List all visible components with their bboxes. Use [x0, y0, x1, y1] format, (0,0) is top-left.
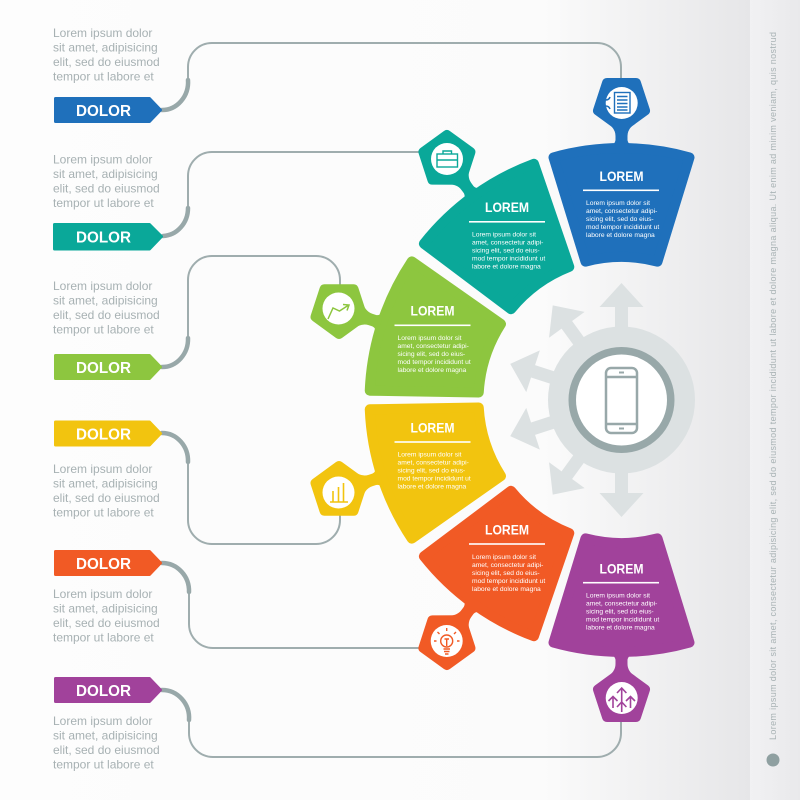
text: blue segment: LOREM [600, 168, 644, 184]
icon: document [606, 87, 638, 119]
text block 3: sit amet, adipisicing [53, 294, 158, 308]
text: green segment: Lorem ipsum dolor sit [398, 335, 462, 342]
icon: bar chart [322, 476, 354, 508]
text: orange segment: labore et dolore magna [472, 586, 541, 593]
text: teal segment: labore et dolore magna [472, 264, 541, 270]
text: purple segment: LOREM [600, 560, 644, 576]
icon: three up arrows [606, 682, 638, 714]
connector: blue [162, 43, 621, 110]
text: blue segment [583, 168, 659, 239]
text block 2 [53, 152, 160, 210]
text block 3: tempor ut labore et [53, 322, 154, 336]
panel: blue segment [554, 83, 690, 262]
text: teal segment [469, 199, 545, 270]
text block 5: elit, sed do eiusmod [53, 616, 160, 630]
tag: green dolor: DOLOR [76, 360, 131, 377]
pentagon badge [416, 606, 480, 670]
text: orange segment: mod tempor incididunt ut [472, 578, 545, 585]
sidebar dot [766, 754, 780, 766]
tag: purple dolor: DOLOR [76, 683, 131, 700]
text: orange segment: Lorem ipsum dolor sit [472, 554, 536, 561]
connector: orange [162, 563, 420, 648]
text block 4: sit amet, adipisicing [53, 476, 158, 490]
hub rings [548, 326, 695, 474]
text: yellow segment: LOREM [410, 419, 454, 435]
text block 3: Lorem ipsum dolor [53, 279, 152, 293]
text block 6: elit, sed do eiusmod [53, 743, 160, 757]
tag: blue dolor [56, 98, 160, 122]
text: green segment [394, 303, 471, 374]
icon: briefcase [431, 143, 463, 175]
text: blue segment: Lorem ipsum dolor sit [586, 200, 650, 207]
tag: orange dolor [56, 552, 160, 574]
panel: teal segment [380, 104, 595, 328]
text: orange segment: LOREM [485, 521, 529, 537]
text block 4: Lorem ipsum dolor [53, 462, 152, 476]
text: orange segment [469, 521, 545, 593]
connector: green [162, 256, 340, 367]
tag: teal dolor [54, 224, 162, 249]
icon: smartphone [606, 368, 637, 433]
text: teal segment: Lorem ipsum dolor sit [472, 232, 536, 238]
text: green segment: sicing elit, sed do eius- [398, 351, 465, 358]
text block 1: elit, sed do eiusmod [53, 55, 160, 69]
text block 2: sit amet, adipisicing [53, 167, 158, 181]
central hub with arrows [503, 283, 695, 517]
text: yellow segment: sicing elit, sed do eius- [398, 468, 465, 475]
connector: yellow [162, 433, 340, 544]
text block 5: tempor ut labore et [53, 630, 154, 644]
text block 6 [53, 714, 160, 772]
text: green segment: mod tempor incididunt ut [398, 359, 471, 366]
text: green segment: labore et dolore magna [398, 367, 467, 374]
text block 1: Lorem ipsum dolor [53, 26, 152, 40]
sidebar panel [750, 0, 800, 800]
panel: purple segment [554, 538, 690, 717]
text: green segment: LOREM [410, 303, 454, 319]
text block 6: tempor ut labore et [53, 758, 154, 772]
pentagon badge [598, 83, 645, 128]
text: orange segment: amet, consectetur adipi- [472, 562, 543, 569]
text: yellow segment [394, 419, 471, 491]
text block 2: elit, sed do eiusmod [53, 182, 160, 196]
text block 4 [53, 462, 160, 520]
text: yellow segment: amet, consectetur adipi- [398, 460, 469, 467]
text: purple segment: amet, consectetur adipi- [586, 600, 657, 607]
text block 1: tempor ut labore et [53, 70, 154, 84]
text: yellow segment: mod tempor incididunt ut [398, 476, 471, 483]
tag: green dolor [56, 356, 160, 378]
text block 6: Lorem ipsum dolor [53, 714, 152, 728]
connector: purple [162, 690, 621, 757]
radiating arrows [503, 283, 644, 517]
pentagon badge [313, 461, 370, 519]
text block 6: sit amet, adipisicing [53, 728, 158, 742]
text block 5: sit amet, adipisicing [53, 602, 158, 616]
text: blue segment: amet, consectetur adipi- [586, 208, 657, 215]
pentagon badge [416, 130, 480, 194]
pentagon badge [313, 281, 370, 339]
tag: yellow dolor [56, 422, 160, 445]
text: blue segment: labore et dolore magna [586, 232, 655, 239]
panel: green segment [299, 238, 511, 423]
text block 3 [53, 279, 160, 336]
tag: blue dolor: DOLOR [76, 103, 131, 120]
text: purple segment: sicing elit, sed do eius- [586, 608, 654, 615]
icon: rising line chart [322, 292, 354, 324]
sidebar vertical text: Lorem ipsum dolor sit amet, consectetur adipisicing elit, sed do eiusmod tempor incididunt ut labore et dolore magna aliqua. Ut enim ad minim veniam, quis nostrud [768, 32, 778, 740]
text: teal segment: LOREM [485, 199, 529, 215]
text: blue segment: mod tempor incididunt ut [586, 224, 659, 231]
text block 1: sit amet, adipisicing [53, 40, 158, 54]
panel: orange segment [380, 472, 595, 696]
text block 5: Lorem ipsum dolor [53, 587, 152, 601]
tag: purple dolor [56, 678, 160, 702]
text block 2: Lorem ipsum dolor [53, 152, 152, 166]
text: purple segment: mod tempor incididunt ut [586, 616, 659, 623]
text: blue segment: sicing elit, sed do eius- [586, 216, 654, 223]
panel: yellow segment [299, 377, 511, 562]
text block 5 [53, 587, 160, 644]
pentagon badge [598, 672, 645, 717]
icon: light bulb [431, 625, 463, 657]
text: green segment: amet, consectetur adipi- [398, 343, 469, 350]
text block 1 [53, 26, 160, 84]
text block 2: tempor ut labore et [53, 196, 154, 210]
text: purple segment [583, 560, 659, 631]
text: orange segment: sicing elit, sed do eius- [472, 570, 540, 577]
text block 4: elit, sed do eiusmod [53, 491, 160, 505]
text block 4: tempor ut labore et [53, 506, 154, 520]
text block 3: elit, sed do eiusmod [53, 308, 160, 322]
tag: orange dolor: DOLOR [76, 556, 131, 573]
text: teal segment: mod tempor incididunt ut [472, 256, 545, 262]
text: purple segment: Lorem ipsum dolor sit [586, 592, 650, 599]
text: purple segment: labore et dolore magna [586, 624, 655, 631]
tag: teal dolor: DOLOR [76, 230, 131, 246]
tag: yellow dolor: DOLOR [76, 426, 131, 444]
text: teal segment: amet, consectetur adipi- [472, 240, 543, 246]
text: yellow segment: labore et dolore magna [398, 484, 467, 491]
text: teal segment: sicing elit, sed do eius- [472, 248, 540, 254]
connector: teal [163, 152, 420, 236]
text: yellow segment: Lorem ipsum dolor sit [398, 452, 462, 459]
